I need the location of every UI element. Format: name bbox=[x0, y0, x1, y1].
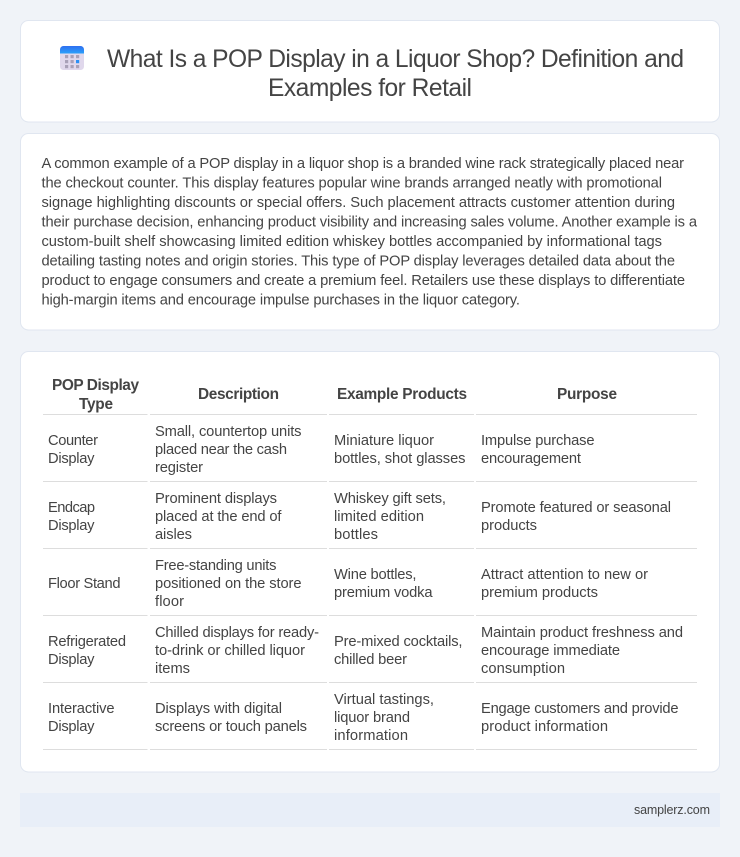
row: endcap display: aisles bbox=[155, 527, 192, 543]
row: interactive display: product information bbox=[481, 719, 608, 735]
table header row: Type bbox=[79, 396, 113, 413]
row: endcap display: bottles bbox=[334, 527, 378, 543]
row: endcap display: placed at the end of bbox=[155, 509, 282, 525]
title: What Is a POP Display in a Liquor Shop? Definition and bbox=[107, 46, 684, 73]
panel: description text: the checkout counter. This display features popular wine brands arranged neatly with promotional bbox=[42, 176, 662, 192]
row: floor stand: Free-standing units bbox=[155, 558, 276, 574]
row: refrigerated display: Chilled displays for ready- bbox=[155, 625, 319, 641]
table header row bbox=[52, 377, 617, 413]
row: endcap display: Promote featured or seasonal bbox=[481, 500, 671, 516]
panel: description text bbox=[20, 134, 720, 330]
row: interactive display: liquor brand bbox=[334, 710, 410, 726]
row: refrigerated display: consumption bbox=[481, 661, 565, 677]
row: endcap display: Prominent displays bbox=[155, 491, 277, 507]
row: refrigerated display bbox=[48, 625, 683, 677]
row: refrigerated display: Display bbox=[48, 652, 95, 668]
row: floor stand: premium products bbox=[481, 585, 598, 601]
row: floor stand: Attract attention to new or bbox=[481, 567, 648, 583]
row: counter display bbox=[48, 424, 594, 476]
panel: description text: product to engage consumers and create a premium feel. Retailers use these displays to differentiate bbox=[42, 273, 685, 289]
panel: description text: signage highlighting discounts or special offers. Such placement attracts customer attention during bbox=[42, 195, 675, 211]
row: counter display: encouragement bbox=[481, 451, 581, 467]
row: counter display: placed near the cash bbox=[155, 442, 287, 458]
row: endcap display bbox=[48, 491, 671, 543]
row: interactive display: Interactive bbox=[48, 701, 114, 717]
row: floor stand: floor bbox=[155, 594, 184, 610]
row: interactive display: Display bbox=[48, 719, 95, 735]
row: endcap display: limited edition bbox=[334, 509, 424, 525]
row: counter display: Counter bbox=[48, 433, 98, 449]
table header row: Example Products bbox=[337, 386, 467, 403]
row: interactive display: Virtual tastings, bbox=[334, 692, 434, 708]
row: interactive display bbox=[48, 692, 678, 744]
panel: header card bbox=[20, 20, 720, 122]
panel: table card bbox=[20, 352, 720, 772]
panel: description text: A common example of a POP display in a liquor shop is a branded wine rack strategically placed near bbox=[42, 156, 684, 172]
row: refrigerated display: Pre-mixed cocktails, bbox=[334, 634, 462, 650]
row: interactive display: Engage customers and provide bbox=[481, 701, 678, 717]
row: counter display: bottles, shot glasses bbox=[334, 451, 466, 467]
row: refrigerated display: encourage immediate bbox=[481, 643, 620, 659]
row: floor stand: Wine bottles, bbox=[334, 567, 416, 583]
panel: description text: custom-built shelf showcasing limited edition whiskey bottles accompanied by informational tags bbox=[42, 234, 662, 250]
row: endcap display: Endcap bbox=[48, 500, 95, 516]
row: refrigerated display: to-drink or chilled liquor bbox=[155, 643, 305, 659]
row: endcap display: products bbox=[481, 518, 537, 534]
table header row: Description bbox=[198, 386, 279, 403]
row: refrigerated display: items bbox=[155, 661, 190, 677]
row: floor stand: premium vodka bbox=[334, 585, 433, 601]
panel: description text: detailing tasting notes and origin stories. This type of POP display leverages detailed data about the bbox=[42, 254, 675, 270]
row: counter display: Small, countertop units bbox=[155, 424, 302, 440]
panel: description text: high-margin items and encourage impulse purchases in the liquor category. bbox=[42, 292, 520, 308]
row: floor stand: positioned on the store bbox=[155, 576, 302, 592]
icon: calendar bbox=[60, 46, 84, 70]
row: floor stand: Floor Stand bbox=[48, 576, 120, 592]
footer bar: samplerz.com bbox=[634, 803, 710, 817]
panel: description text: their purchase decision, enhancing product visibility and increasing sales volume. Another example is a bbox=[42, 214, 698, 230]
row: interactive display: Displays with digital bbox=[155, 701, 282, 717]
row: endcap display: Whiskey gift sets, bbox=[334, 491, 446, 507]
row: endcap display: Display bbox=[48, 518, 95, 534]
row: counter display: Impulse purchase bbox=[481, 433, 594, 449]
row: interactive display: screens or touch panels bbox=[155, 719, 307, 735]
row: refrigerated display: chilled beer bbox=[334, 652, 407, 668]
row: refrigerated display: Maintain product freshness and bbox=[481, 625, 683, 641]
row: counter display: Display bbox=[48, 451, 95, 467]
footer bar bbox=[20, 793, 720, 827]
row: refrigerated display: Refrigerated bbox=[48, 634, 126, 650]
table header row: POP Display bbox=[52, 377, 139, 394]
row: interactive display: information bbox=[334, 728, 408, 744]
row: counter display: register bbox=[155, 460, 203, 476]
title bbox=[107, 46, 684, 102]
row: counter display: Miniature liquor bbox=[334, 433, 434, 449]
table header row: Purpose bbox=[557, 386, 617, 403]
row: floor stand bbox=[48, 558, 648, 610]
title: Examples for Retail bbox=[268, 75, 472, 102]
